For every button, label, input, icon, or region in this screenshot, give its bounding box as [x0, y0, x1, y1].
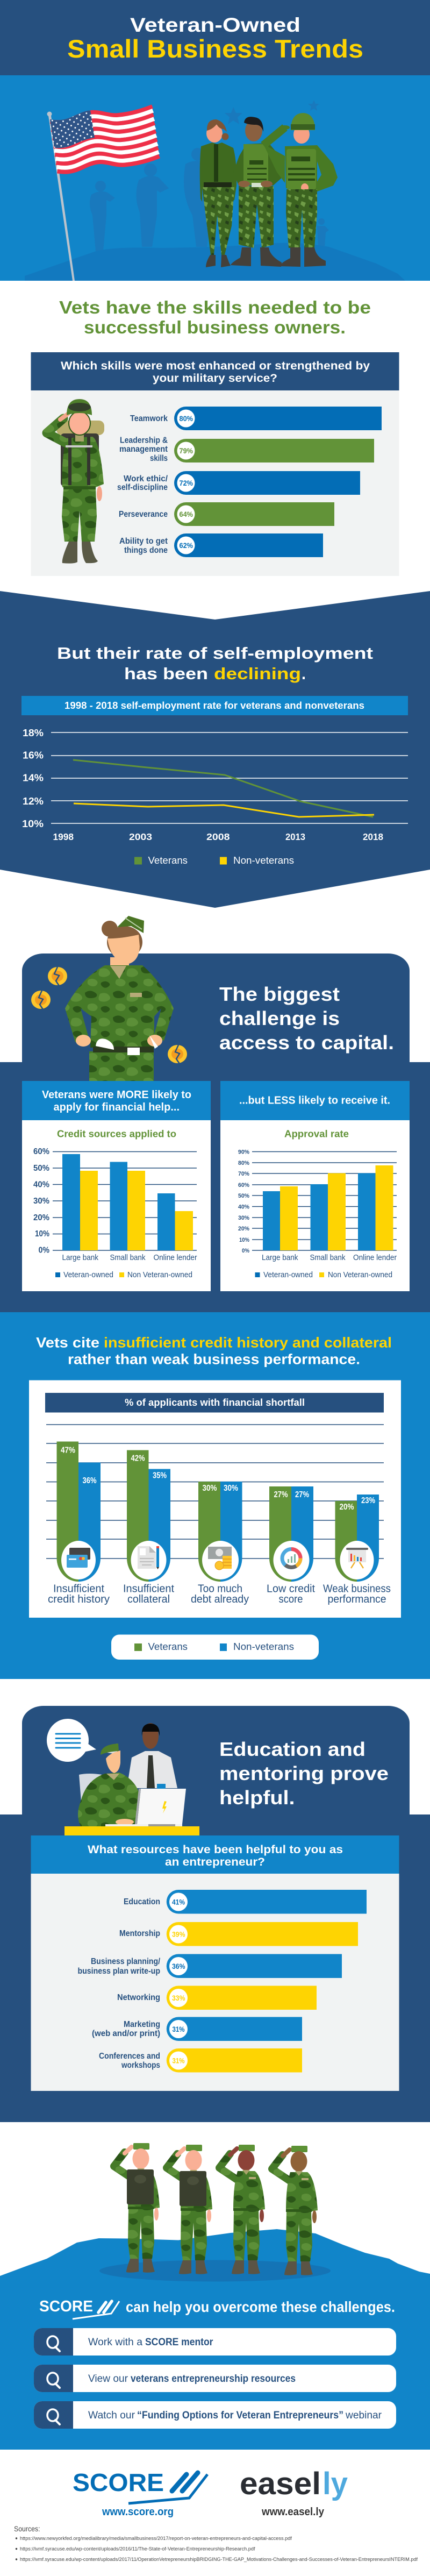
panel: approval rate: ...but LESS likely to receive it. [239, 1095, 390, 1107]
logo: easelly: ly [322, 2466, 348, 2501]
bar: Networking 33% [117, 1986, 317, 2010]
bar group: too much debt: debt already [191, 1593, 249, 1605]
panel: credit sources applied to: Veterans were MORE likely to [42, 1089, 191, 1101]
heading [219, 1738, 389, 1809]
bar: Ability 62%: things done [124, 546, 168, 555]
icon: magnifier [47, 2409, 60, 2424]
bar group: insufficient collateral: collateral [127, 1593, 170, 1605]
legend: Non Veteran-owned [328, 1271, 392, 1279]
line chart: 16% [23, 750, 44, 760]
bar: Perseverance 64%: 64% [180, 510, 193, 518]
icon: document and pencil [138, 1546, 159, 1569]
bar chart: credit sources: Small bank [110, 1254, 146, 1262]
bar: Teamwork 80% [130, 407, 382, 430]
bar: Business planning 36%: 36% [172, 1962, 185, 1970]
section: financial shortfall [0, 1312, 430, 1679]
logo: easelly: www.easel.ly [261, 2506, 325, 2518]
heading: has been [124, 664, 208, 683]
bar chart: credit sources: 20% [33, 1213, 49, 1222]
bar group: insufficient credit history: Insufficient [53, 1583, 104, 1595]
bar: Leadership 79%: skills [150, 454, 168, 463]
bar: Leadership 79% [119, 436, 374, 463]
icon: broken coins [31, 967, 187, 1064]
panel: shortfall chart [29, 1380, 401, 1618]
sources: https://ivmf.syracuse.edu/wp-content/uploads/2016/11/The-State-of-Veteran-Entrepreneurship-Research.pdf [20, 2546, 255, 2552]
icon: donut chart [282, 1549, 300, 1567]
logo: SCORE: SCORE [73, 2468, 164, 2496]
panel: helpful resources chart [31, 1835, 399, 2091]
illustration: four saluting soldiers [114, 2143, 318, 2275]
heading: rather than weak business performance. [68, 1351, 360, 1367]
heading: helpful. [219, 1787, 295, 1809]
line chart: 14% [23, 772, 44, 783]
bar: Networking 33%: Networking [117, 1993, 160, 2002]
bar chart: credit sources: 50% [33, 1164, 49, 1173]
bar: Conferences 31%: workshops [121, 2061, 160, 2070]
section heading: skills: successful business owners. [84, 317, 346, 337]
soldier: woman [200, 119, 236, 267]
legend [134, 855, 294, 866]
illustration: mentor in shirt and tie [127, 1723, 177, 1789]
illustration: woman soldier with empty pockets [65, 916, 174, 1081]
panel: approval rate [220, 1081, 410, 1291]
heading: access to capital. [219, 1031, 394, 1054]
bar: Business planning 36% [77, 1954, 342, 1978]
heading: Vets cite [36, 1335, 99, 1351]
bar chart: approval rate: 50% [238, 1193, 249, 1199]
bar chart: credit sources: 0% [39, 1246, 49, 1255]
line chart: 2013 [285, 831, 305, 842]
line chart: 2008 [206, 831, 230, 842]
bar chart: credit sources: Large bank [62, 1254, 99, 1262]
panel heading: What resources have been helpful to you as [88, 1844, 343, 1856]
panel: approval rate: Approval rate [284, 1128, 349, 1139]
link row: funding webinar: “Funding Options for Veteran Entrepreneurs” [137, 2410, 343, 2421]
bar: Perseverance 64% [119, 502, 334, 526]
bar: Ability 62% [119, 533, 323, 557]
bar group: insufficient collateral: 42% [131, 1454, 145, 1463]
bar chart: approval rate: 70% [238, 1171, 249, 1177]
logo: SCORE [73, 2468, 207, 2518]
soldier: middle man [231, 117, 282, 267]
panel: credit sources applied to [22, 1081, 211, 1291]
bar chart: credit sources: 30% [33, 1197, 49, 1206]
ground and silhouettes [25, 100, 405, 281]
bar chart: credit sources: 40% [33, 1180, 49, 1190]
bar group: weak business performance: 20% [340, 1503, 354, 1512]
sources: https://ivmf.syracuse.edu/wp-content/uploads/2017/11/OperationVetrepreneurshipBRIDGING-THE-GAP_Motivations-Challenges-and-Successes-of-Veteran-EntrepreneursINTERIM.pdf [20, 2557, 418, 2563]
line chart [22, 727, 408, 842]
bar: Mentorship 39% [119, 1922, 358, 1946]
legend: Veteran-owned [263, 1271, 313, 1279]
heading: The biggest [219, 983, 340, 1005]
bar group: weak business performance: Weak business [323, 1583, 391, 1595]
heading with SCORE logo: can help you overcome these challenges. [126, 2299, 395, 2315]
hero illustration [0, 75, 430, 281]
bar: Education 41%: Education [124, 1897, 160, 1906]
heading [36, 1335, 392, 1367]
legend: Veterans [148, 855, 188, 866]
chart title [22, 696, 408, 715]
bar chart: approval rate: 0% [242, 1248, 249, 1254]
logo: easelly: easel [240, 2466, 321, 2501]
title [67, 14, 363, 63]
bar group: insufficient collateral [123, 1450, 174, 1605]
line chart: 10% [22, 818, 44, 829]
panel: self-employment decline [0, 591, 430, 908]
panel: skills bar chart [31, 352, 399, 576]
legend: Non-veterans [233, 855, 294, 866]
heading [57, 644, 373, 683]
bar chart: credit sources: Online lender [154, 1254, 197, 1262]
illustration: older soldier at laptop [64, 1744, 199, 1835]
section heading: skills [59, 297, 371, 337]
legend: Non Veteran-owned [127, 1271, 192, 1279]
bar group: insufficient credit history: 36% [83, 1476, 97, 1485]
heading: But their rate of self-employment [57, 644, 373, 663]
bar: Mentorship 39%: 39% [172, 1930, 185, 1938]
link row: SCORE mentor [34, 2328, 396, 2356]
bar: Ability 62%: Ability to get [119, 537, 168, 546]
bar: Business planning 36%: Business planning/ [91, 1957, 161, 1966]
bar group: low credit score: 27% [295, 1490, 309, 1499]
heading: Education and [219, 1738, 366, 1760]
bar group: weak business performance: 23% [361, 1496, 375, 1505]
logo: SCORE: www.score.org [102, 2506, 174, 2518]
bar: Conferences 31% [99, 2048, 302, 2073]
chart title: 1998 - 2018 self-employment rate for veterans and nonveterans [64, 700, 364, 711]
bar: Work ethic 72%: Work ethic/ [124, 474, 168, 483]
line chart: 12% [23, 795, 44, 807]
panel: education and mentoring [0, 1706, 430, 2122]
bar chart: credit sources: 10% [35, 1229, 49, 1239]
panel: credit sources applied to: Credit sources applied to [57, 1128, 176, 1139]
bar group: low credit score: Low credit [267, 1583, 315, 1595]
link row: funding webinar: webinar [345, 2410, 382, 2421]
bar: Education 41%: 41% [172, 1897, 185, 1906]
bar chart: approval rate [238, 1149, 397, 1262]
bar group: weak business performance [323, 1495, 391, 1605]
bar group: too much debt: 30% [202, 1484, 217, 1493]
bar group: too much debt: 30% [224, 1484, 238, 1493]
bar: Perseverance 64%: Perseverance [119, 510, 168, 519]
bar chart: credit sources [33, 1147, 197, 1262]
panel heading: an entrepreneur? [165, 1856, 265, 1868]
icon: saluting soldier [47, 399, 104, 564]
link row: veterans resources: veterans entrepreneurship resources [131, 2373, 296, 2385]
legend [255, 1271, 392, 1279]
bar: Teamwork 80%: 80% [180, 414, 193, 423]
bar: Leadership 79%: management [119, 445, 168, 454]
line chart: 2018 [363, 831, 383, 842]
bar group: insufficient collateral: 35% [153, 1471, 167, 1480]
legend: Veteran-owned [63, 1271, 113, 1279]
line chart: 2003 [129, 831, 152, 842]
panel: credit sources applied to: apply for financial help... [54, 1101, 180, 1113]
panel heading [31, 352, 399, 390]
heading: mentoring prove [219, 1762, 389, 1784]
panel: access to capital [0, 916, 430, 1312]
bar: Teamwork 80%: Teamwork [130, 414, 168, 423]
panel heading: Which skills were most enhanced or strengthened by [61, 360, 370, 372]
bar: Marketing 31%: Marketing [124, 2020, 160, 2029]
bar chart: credit sources: 60% [33, 1147, 49, 1156]
sources [14, 2525, 418, 2563]
bar chart: approval rate: Large bank [262, 1254, 298, 1262]
heading: declining [214, 664, 301, 683]
bar group: insufficient credit history [48, 1441, 110, 1605]
bar: Mentorship 39%: Mentorship [119, 1929, 160, 1938]
bar: Marketing 31%: 31% [172, 2025, 185, 2033]
bar: Networking 33%: 33% [172, 1994, 185, 2002]
bar: Marketing 31%: (web and/or print) [92, 2029, 160, 2038]
bar: Work ethic 72% [117, 471, 360, 495]
link row: SCORE mentor: Work with a [88, 2337, 142, 2348]
soldier: right man saluting [263, 113, 338, 267]
bar group: too much debt: Too much [198, 1583, 242, 1595]
bar chart: approval rate: Small bank [310, 1254, 346, 1262]
bar group: weak business performance: performance [328, 1593, 386, 1605]
legend [55, 1271, 192, 1279]
link row: SCORE mentor: SCORE mentor [145, 2337, 213, 2348]
bar: Conferences 31%: Conferences and [99, 2052, 160, 2061]
sources: https://www.newyorkfed.org/medialibrary/media/smallbusiness/2017/report-on-veteran-entrepreneurs-and-capital-access.pdf [20, 2536, 292, 2542]
link row: funding webinar: Watch our [88, 2410, 135, 2421]
bar: Business planning 36%: business plan write-up [77, 1967, 160, 1976]
panel heading: your military service? [153, 372, 277, 385]
header band [0, 0, 430, 75]
section heading: skills: Vets have the skills needed to be [59, 297, 371, 317]
bar chart: approval rate: 90% [238, 1149, 249, 1155]
chart title [45, 1393, 384, 1412]
link row: veterans resources: View our [88, 2373, 128, 2385]
link row: veterans resources [34, 2365, 396, 2392]
bar group: low credit score: score [278, 1593, 303, 1605]
chart title: % of applicants with financial shortfall [125, 1397, 305, 1408]
bar: Marketing 31% [92, 2017, 302, 2041]
icon: speech bubble [47, 1719, 96, 1762]
icon: American flag [47, 106, 160, 281]
bar chart: approval rate: 10% [239, 1237, 249, 1243]
bar group: insufficient collateral: Insufficient [123, 1583, 174, 1595]
bar group: too much debt [191, 1482, 249, 1605]
bar: Leadership 79%: Leadership & [120, 436, 168, 445]
panel heading [31, 1835, 399, 1874]
link row: funding webinar [34, 2401, 396, 2429]
bar chart: approval rate: 20% [238, 1226, 249, 1232]
bar group: insufficient credit history: credit history [48, 1593, 110, 1605]
icon: credit card [67, 1548, 90, 1568]
line chart: 1998 [53, 831, 74, 842]
logo: easelly [240, 2466, 348, 2518]
section: SCORE call to action [0, 2143, 430, 2450]
icon: laptop [105, 1789, 186, 1826]
heading: insufficient credit history and collateral [104, 1335, 392, 1351]
bar chart: approval rate: 40% [238, 1204, 249, 1210]
legend: Veterans [148, 1641, 188, 1652]
sources: Sources: [14, 2525, 40, 2533]
bar chart: approval rate: Online lender [353, 1254, 397, 1262]
legend [111, 1635, 319, 1660]
icon: presentation board [346, 1548, 368, 1568]
bar chart: approval rate: 60% [238, 1182, 249, 1189]
heading: challenge is [219, 1007, 340, 1029]
bar: Work ethic 72%: 72% [180, 479, 193, 487]
bar chart: approval rate: 30% [238, 1215, 249, 1221]
heading: . [302, 664, 306, 683]
bar: Ability 62%: 62% [180, 541, 193, 550]
heading with SCORE logo: SCORE [39, 2298, 93, 2315]
icon: magnifier [47, 2336, 60, 2351]
bar: Conferences 31%: 31% [172, 2056, 185, 2065]
bar: Leadership 79%: 79% [180, 446, 193, 455]
title: Small Business Trends [67, 34, 363, 63]
bar group: low credit score: 27% [274, 1490, 288, 1499]
bar group: low credit score [267, 1486, 315, 1605]
icon: magnifier [47, 2373, 60, 2388]
heading [219, 983, 394, 1054]
bar: Education 41% [124, 1890, 367, 1913]
line chart: 18% [23, 727, 44, 738]
legend: Non-veterans [233, 1641, 294, 1652]
heading with SCORE logo [39, 2298, 395, 2319]
title: Veteran-Owned [130, 14, 300, 36]
bar: Work ethic 72%: self-discipline [117, 483, 168, 492]
bar chart: approval rate: 80% [238, 1160, 249, 1166]
bar group: insufficient credit history: 47% [61, 1446, 75, 1455]
icon: money and coins [208, 1547, 232, 1570]
